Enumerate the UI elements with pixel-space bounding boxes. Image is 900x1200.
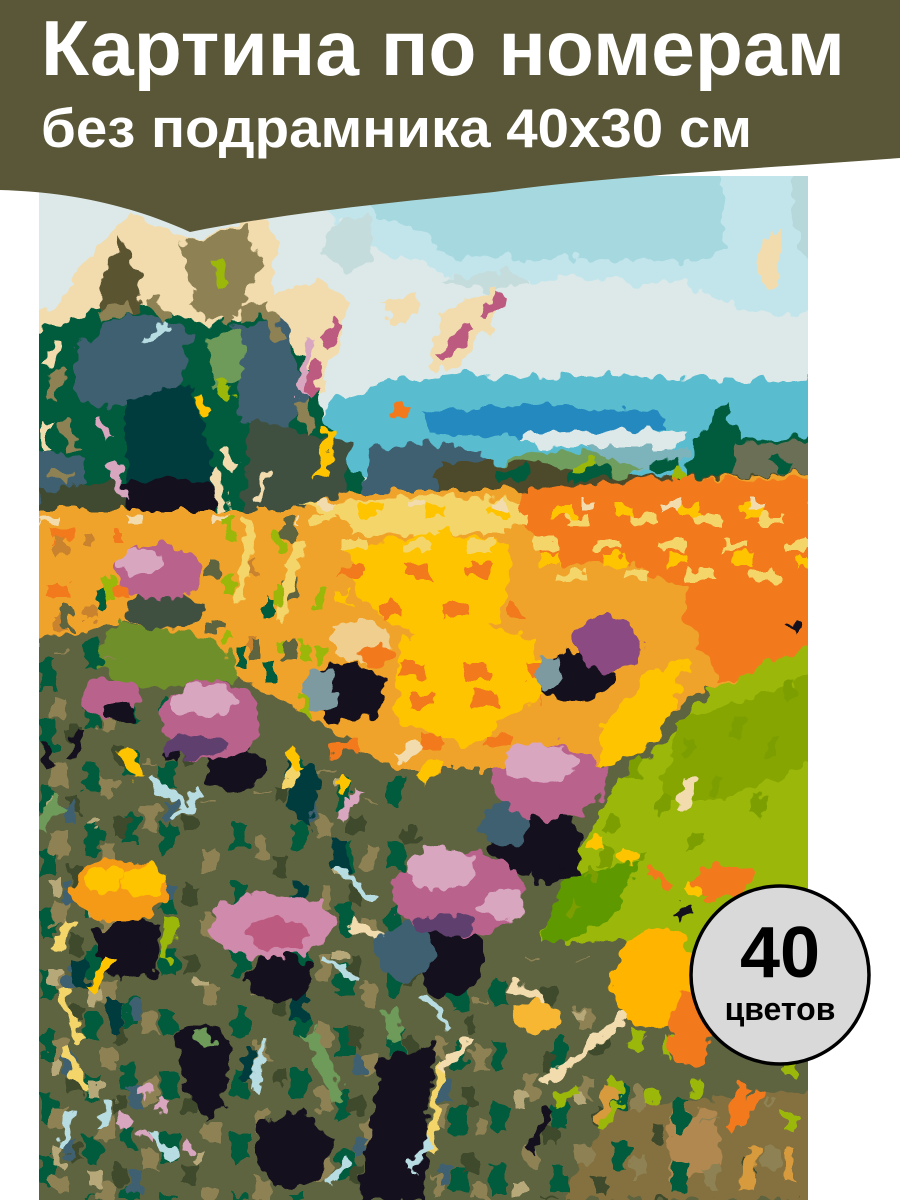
- badge: 40 colours: 40: [740, 913, 820, 993]
- dark shadows: [96, 760, 582, 1200]
- thistle bud: centre: [304, 618, 391, 722]
- thistle: right bud: [534, 616, 642, 702]
- title: Картина по номерам: [41, 4, 845, 92]
- thistle: small left: [82, 679, 142, 721]
- thistle: lower centre: [374, 846, 527, 996]
- yellow grass blade: [505, 1108, 597, 1180]
- pale teal patch: [120, 1030, 176, 1110]
- orange flower left: [72, 858, 168, 922]
- cream haze behind trees: [39, 212, 350, 420]
- badge: 40 colours: [691, 886, 869, 1064]
- sky: [39, 176, 808, 484]
- thistle: right centre: [481, 744, 606, 876]
- pale flowers patch: [120, 1085, 190, 1170]
- mountains: [322, 368, 808, 496]
- subtitle: без подрамника 40х30 см: [41, 97, 752, 159]
- painting: meadow with thistles: [39, 176, 808, 1200]
- background trees: [39, 223, 366, 514]
- header banner: [0, 0, 900, 232]
- thistle: centre left: [160, 680, 265, 792]
- thistle: upper left: [116, 544, 205, 628]
- green slope: [540, 646, 808, 953]
- thistle: lower left: [210, 893, 334, 1002]
- orange field: [39, 468, 808, 775]
- orange flower right: [512, 865, 755, 1066]
- lower foreground mosaic: [39, 618, 808, 1200]
- brush texture: [40, 260, 800, 1185]
- badge: 40 colours: цветов: [725, 991, 835, 1027]
